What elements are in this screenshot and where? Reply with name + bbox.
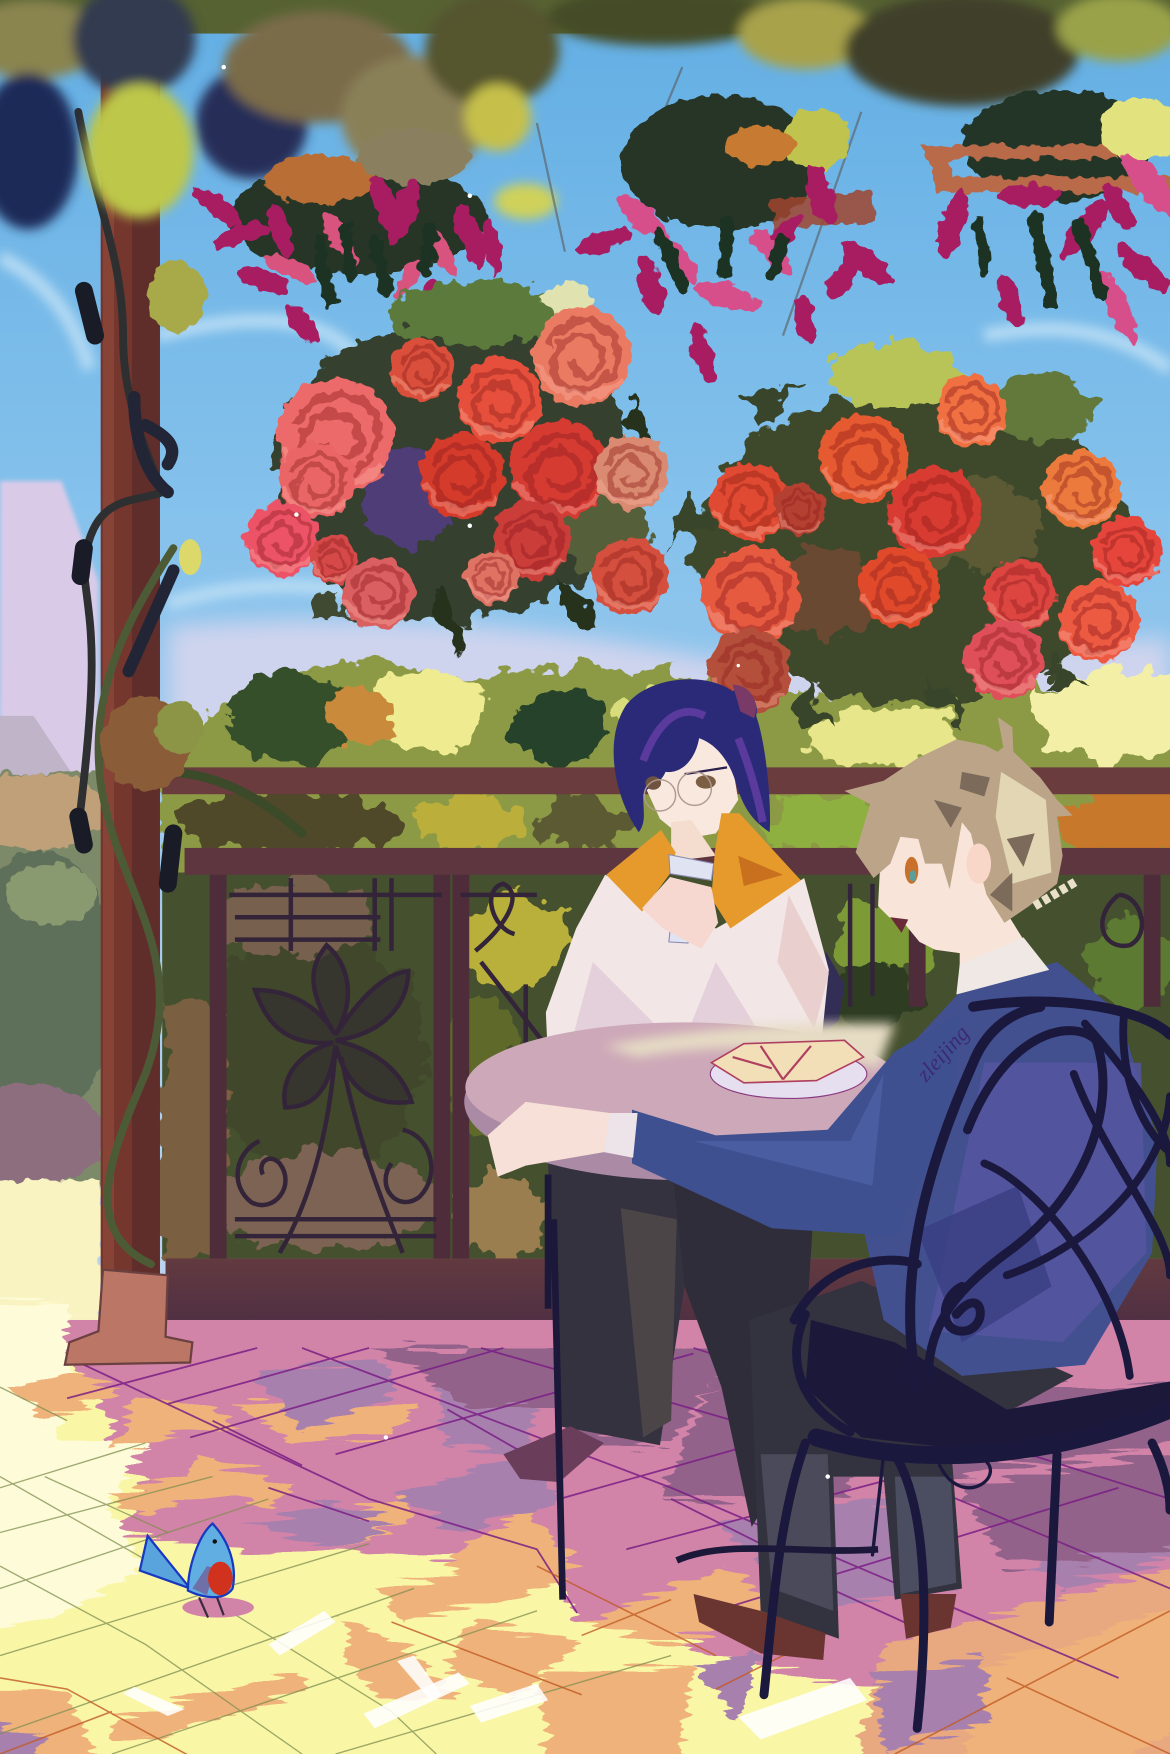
boy: shirt collar <box>956 937 1049 994</box>
distant left trees and light <box>0 772 117 1331</box>
boy: light haired figure <box>488 717 1158 1660</box>
railing back panel greenery <box>162 873 1170 1258</box>
basket foliage <box>274 282 660 654</box>
girl: face <box>641 727 738 839</box>
bird eye and legs <box>199 1539 224 1618</box>
plate with pastry <box>710 1040 867 1098</box>
girl: trousers <box>548 1163 685 1445</box>
pergola post <box>65 67 192 1365</box>
girl's chair front leg <box>548 1175 878 1600</box>
bird tail <box>140 1536 190 1588</box>
floating light specks <box>221 65 830 1479</box>
top canopy foliage <box>0 0 1170 229</box>
floor: sunlit area <box>0 1303 895 1754</box>
wall base <box>166 1258 1170 1346</box>
bird breast <box>208 1562 233 1595</box>
boy: eye <box>905 857 918 884</box>
boy: mouth <box>890 917 908 933</box>
boy: ear <box>966 843 991 884</box>
signature on sweater: zleijing <box>911 1021 974 1087</box>
roses <box>245 307 669 629</box>
girl: shoe <box>503 1426 604 1482</box>
chair seat cushion <box>805 1320 1170 1454</box>
floor: tile lines <box>67 1348 1170 1678</box>
girl: hands <box>642 877 718 949</box>
roses <box>702 375 1161 714</box>
boy: sweater body <box>861 962 1158 1376</box>
floor: pale highlight <box>0 1303 151 1644</box>
boy: cuff and hand <box>604 1113 638 1158</box>
hanging rose basket: left <box>245 282 669 654</box>
bird body <box>188 1524 234 1597</box>
hanging rose basket: right <box>671 343 1161 727</box>
wrought iron chair <box>764 1002 1170 1728</box>
boy: neck and face <box>878 805 1023 984</box>
girl: blue haired figure <box>503 679 845 1527</box>
floor: white highlights <box>123 1611 867 1739</box>
girl: hair <box>614 679 770 832</box>
boy: hair <box>845 717 1073 923</box>
background garden foliage <box>162 660 1170 873</box>
hanging planter: centre <box>573 95 898 385</box>
basket foliage <box>671 343 1130 727</box>
boy: sweater arm <box>632 1012 962 1236</box>
girl: eyes and glasses <box>644 767 727 811</box>
floor <box>0 1303 1170 1754</box>
girl: chair back <box>822 951 845 1035</box>
planter hanging wires <box>537 67 861 336</box>
railing upper rail <box>162 767 1170 794</box>
climbing vines on post <box>78 112 302 1264</box>
floor: deep shade patches <box>369 1348 1170 1566</box>
boy: shoes <box>693 1594 825 1660</box>
railing middle rail <box>185 848 1170 875</box>
boy: hair tie <box>1035 881 1076 906</box>
hanging planter: left <box>189 129 506 347</box>
post base <box>65 1270 192 1365</box>
floor: right corner warm patch <box>839 1555 1170 1754</box>
girl: sweater <box>546 875 829 1063</box>
table <box>464 1022 905 1180</box>
girl: raised finger <box>671 820 716 861</box>
girl: glass <box>669 855 714 943</box>
hanging planter: right <box>923 89 1170 348</box>
boy: trousers <box>749 1281 1074 1639</box>
floor: orange patches <box>0 1370 1170 1754</box>
wrought iron railing <box>218 875 1152 1258</box>
small bird <box>140 1524 254 1618</box>
bird shadow <box>182 1597 254 1618</box>
floor: lavender shadows <box>0 1359 1170 1754</box>
girl: orange collar <box>606 813 801 928</box>
